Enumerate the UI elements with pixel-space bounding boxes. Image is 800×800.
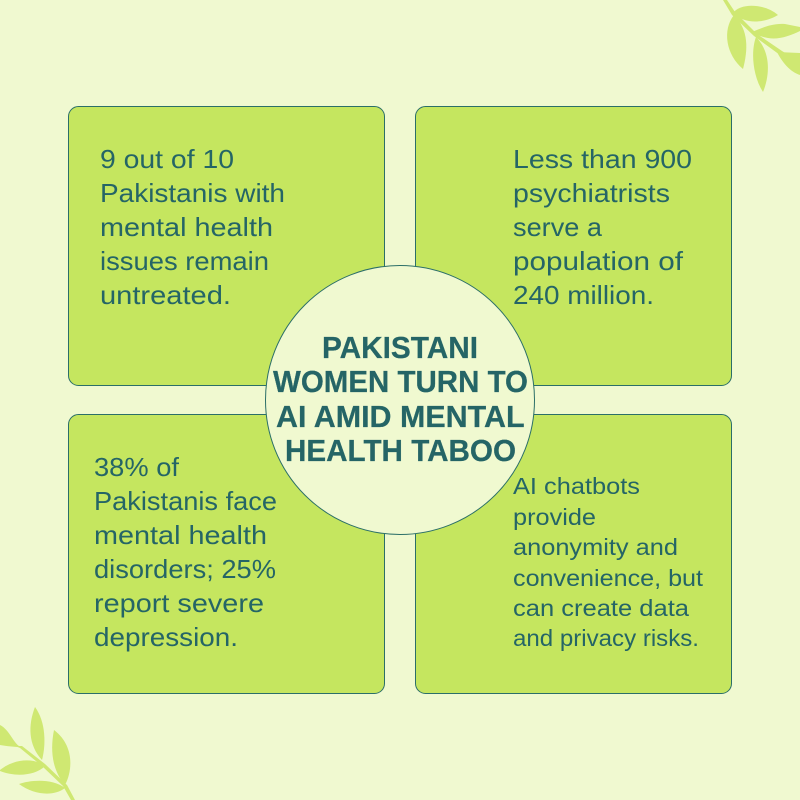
text: disorders statistic: 38% of [94,452,180,482]
center circle with title [266,266,537,534]
text: disorders statistic: Pakistanis face [94,486,277,516]
text: disorders statistic: disorders; 25% [94,554,276,584]
text: disorders statistic: mental health [94,520,267,550]
text: disorders statistic: depression. [94,622,238,652]
text: AI chatbots: AI chatbots [513,473,640,499]
text: untreated statistic: issues remain [100,246,269,276]
text: psychiatrists statistic: Less than 900 [513,144,692,174]
text: psychiatrists statistic: psychiatrists [513,178,670,208]
panel: disorders statistic [68,414,384,694]
text: psychiatrists statistic: population of [513,246,684,276]
title: HEALTH TABOO [285,433,516,468]
text: AI chatbots: can create data [513,595,689,621]
panel: AI chatbots [416,414,732,694]
icon: leaf branch top right [723,0,800,92]
text: AI chatbots: and privacy risks. [513,625,699,651]
text: psychiatrists statistic: 240 million. [513,280,654,310]
icon: leaf branch bottom left [0,707,75,800]
text: psychiatrists statistic: serve a [513,212,603,242]
text: disorders statistic: report severe [94,588,264,618]
text: AI chatbots: provide [513,504,596,530]
title: AI AMID MENTAL [276,399,524,434]
text: untreated statistic: Pakistanis with [100,178,285,208]
text: AI chatbots: anonymity and [513,534,678,560]
text: untreated statistic: mental health [100,212,273,242]
text: untreated statistic: untreated. [100,280,231,310]
panel: psychiatrists statistic [416,106,732,386]
panel: untreated statistic [68,106,384,386]
title: PAKISTANI [322,330,478,365]
text: untreated statistic: 9 out of 10 [100,144,234,174]
text: AI chatbots: convenience, but [513,565,704,591]
title: WOMEN TURN TO [273,364,528,399]
